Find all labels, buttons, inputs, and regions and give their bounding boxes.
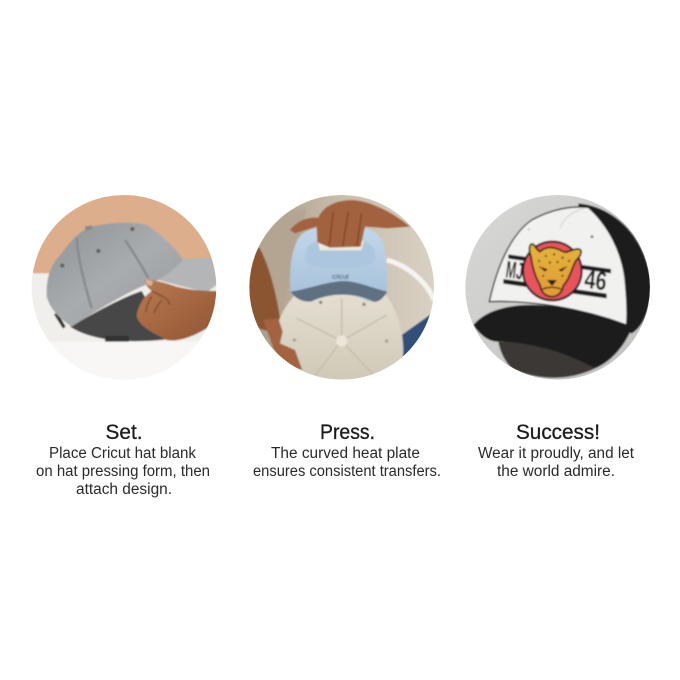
description: Press: The curved heat plate — [271, 445, 420, 462]
photo: finished trucker hat with leopard patch: 46 — [583, 264, 608, 296]
heading: Success!: Success! — [516, 421, 600, 444]
heading: Press.: Press. — [320, 421, 375, 444]
step 1 text — [36, 421, 210, 498]
description: Success: Wear it proudly, and let — [478, 445, 635, 462]
description: Press: ensures consistent transfers. — [253, 463, 441, 480]
photo: heat press on hat: cricut — [332, 274, 349, 281]
photo: finished trucker hat with leopard patch: MJ — [504, 256, 525, 285]
heading: Set.: Set. — [106, 421, 142, 444]
step 2 text — [253, 421, 441, 480]
description: Success: the world admire. — [497, 463, 615, 480]
photo: finished trucker hat with leopard patch — [463, 193, 653, 383]
description: Success — [478, 445, 635, 480]
description: Press — [253, 445, 441, 480]
description: Set: Place Cricut hat blank — [49, 445, 196, 462]
description: Set — [36, 445, 210, 498]
photo: heat press on hat — [247, 192, 437, 383]
description: Set: attach design. — [76, 481, 172, 498]
step 3 text — [478, 421, 635, 480]
photo: hat on pressing form — [32, 195, 216, 380]
infographic — [32, 195, 650, 498]
description: Set: on hat pressing form, then — [36, 463, 210, 480]
